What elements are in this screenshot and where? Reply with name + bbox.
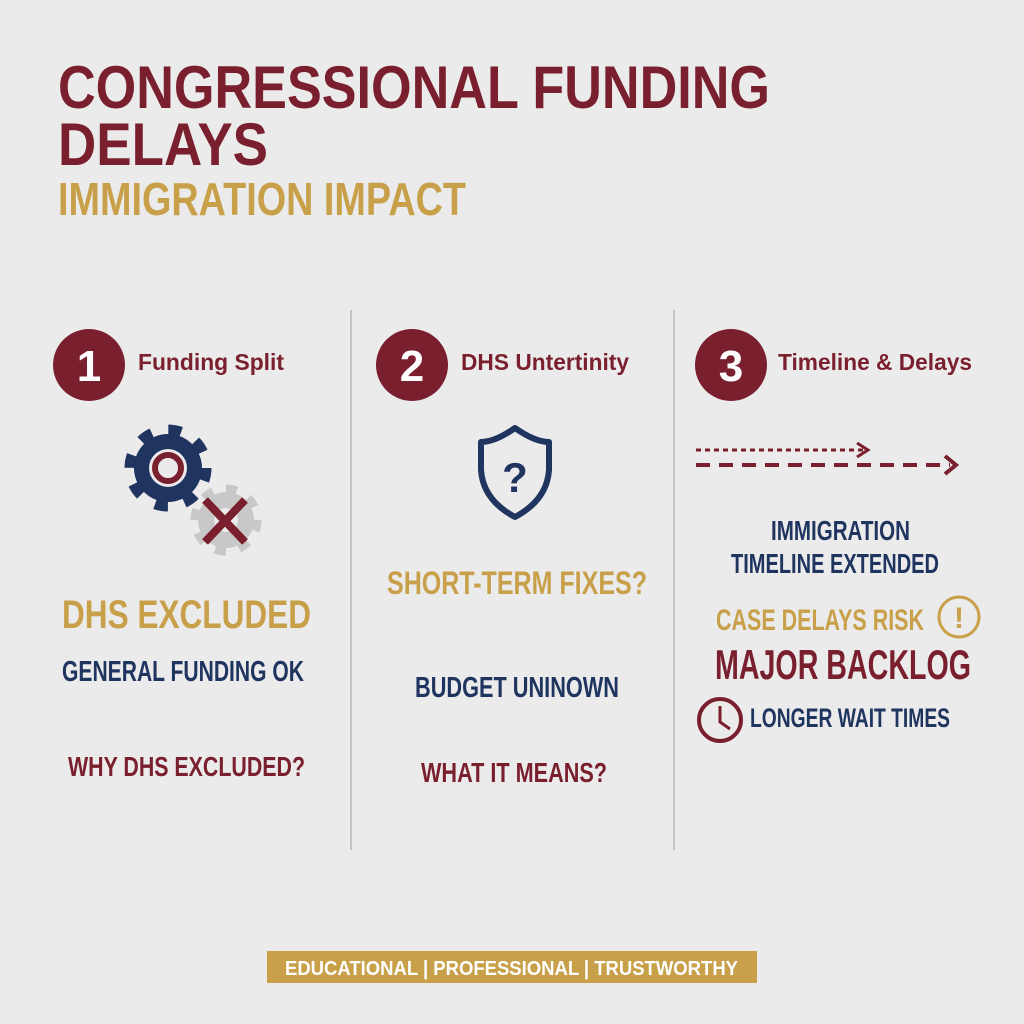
badge 2: 2 bbox=[400, 342, 424, 391]
panel: funding split bbox=[53, 329, 311, 782]
icon: shield question: ? bbox=[502, 454, 528, 501]
badge 1 bbox=[53, 329, 125, 401]
heading: funding split: Funding Split bbox=[138, 349, 284, 375]
text: short-term fixes: SHORT-TERM FIXES? bbox=[387, 565, 647, 601]
heading: timeline & delays: Timeline & Delays bbox=[778, 349, 972, 375]
text: longer wait times: LONGER WAIT TIMES bbox=[750, 703, 950, 733]
icon: gears bbox=[130, 430, 257, 551]
text: immigration timeline extended: TIMELINE EXTENDED bbox=[731, 548, 939, 579]
text: budget uninown: BUDGET UNINOWN bbox=[415, 672, 619, 704]
title: CONGRESSIONAL FUNDING bbox=[58, 54, 770, 121]
panel: timeline bbox=[695, 329, 979, 741]
icon: clock bbox=[699, 699, 741, 741]
badge 2 bbox=[376, 329, 448, 401]
text: case delays risk: CASE DELAYS RISK bbox=[716, 604, 924, 637]
panel: dhs uncertainty bbox=[376, 329, 647, 788]
icon: exclamation: ! bbox=[954, 602, 964, 635]
text: general funding ok: GENERAL FUNDING OK bbox=[62, 656, 304, 688]
arrows: timeline bbox=[696, 443, 956, 474]
badge 3: 3 bbox=[719, 342, 743, 391]
badge 3 bbox=[695, 329, 767, 401]
text: why dhs excluded: WHY DHS EXCLUDED? bbox=[68, 751, 305, 782]
title: DELAYS bbox=[58, 111, 268, 178]
title bbox=[58, 54, 770, 178]
subtitle: IMMIGRATION IMPACT bbox=[58, 173, 466, 225]
text: immigration timeline extended bbox=[731, 515, 939, 579]
text: dhs excluded: DHS EXCLUDED bbox=[62, 593, 311, 637]
badge 1: 1 bbox=[77, 342, 101, 391]
footer banner bbox=[267, 951, 757, 983]
text: what it means: WHAT IT MEANS? bbox=[421, 757, 607, 788]
icon: shield question bbox=[481, 428, 549, 517]
heading: dhs untertinity: DHS Untertinity bbox=[461, 349, 629, 375]
footer banner: EDUCATIONAL | PROFESSIONAL | TRUSTWORTHY bbox=[285, 958, 739, 980]
icon: exclamation bbox=[939, 597, 979, 637]
text: immigration timeline extended: IMMIGRATION bbox=[771, 515, 910, 546]
